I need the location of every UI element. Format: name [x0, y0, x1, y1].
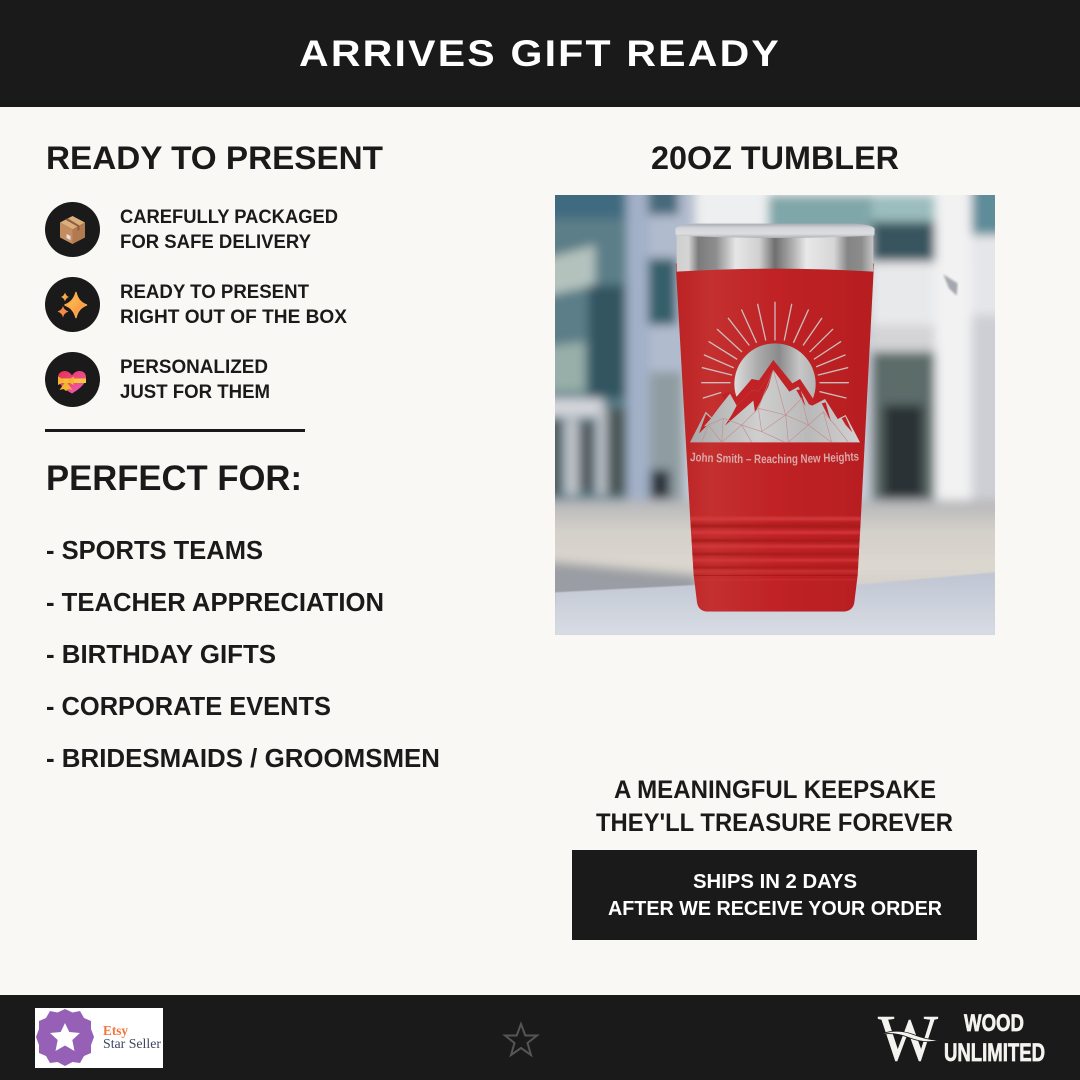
- feature text: FOR SAFE DELIVERY: [120, 232, 311, 253]
- engraved sun logo: John Smith – Reaching New Heights: [690, 452, 859, 466]
- engraved sun logo: [690, 302, 860, 466]
- logo mark: W: W: [878, 1002, 939, 1075]
- feature: personalized: [45, 352, 270, 407]
- footer bar: [0, 995, 1080, 1080]
- feature text: READY TO PRESENT: [120, 282, 309, 303]
- table surface: [555, 572, 995, 635]
- feature: carefully packaged: [45, 202, 338, 257]
- heading: perfect for: PERFECT FOR:: [46, 459, 302, 498]
- occasions list: - TEACHER APPRECIATION: [46, 589, 384, 617]
- engraved name line: [690, 460, 859, 463]
- shipping callout: AFTER WE RECEIVE YOUR ORDER: [608, 898, 943, 920]
- occasions list: - SPORTS TEAMS: [46, 537, 263, 565]
- feature text: JUST FOR THEM: [120, 382, 270, 403]
- photo background: blurred building: [535, 175, 1015, 655]
- shipping callout: SHIPS IN 2 DAYS: [693, 871, 857, 893]
- title: ARRIVES GIFT READY: [299, 33, 781, 74]
- badge: etsy star seller: [35, 1008, 163, 1068]
- tumbler steel band: [677, 235, 873, 272]
- heading: 20oz tumbler: 20OZ TUMBLER: [651, 140, 899, 176]
- feature text: PERSONALIZED: [120, 357, 268, 378]
- icon: gift heart: [58, 371, 86, 394]
- logo: wood unlimited: WOOD: [964, 1010, 1024, 1037]
- shipping callout: [572, 850, 977, 940]
- keepsake tagline: [596, 776, 953, 837]
- feature text: [120, 207, 338, 253]
- tumbler body: [668, 263, 882, 613]
- heading: ready to present: READY TO PRESENT: [46, 140, 383, 176]
- feature text: [120, 282, 347, 328]
- icon: sparkles: [58, 292, 86, 318]
- badge: etsy star seller: Star Seller: [103, 1036, 162, 1051]
- logo: wood unlimited: [878, 1002, 1045, 1075]
- feature text: [120, 357, 270, 403]
- occasions list: [46, 537, 440, 773]
- occasions list: - BIRTHDAY GIFTS: [46, 641, 276, 669]
- badge: etsy star seller: Etsy: [103, 1024, 128, 1039]
- feature text: RIGHT OUT OF THE BOX: [120, 307, 347, 328]
- product photo: red tumbler: [555, 195, 995, 635]
- keepsake tagline: THEY'LL TREASURE FOREVER: [596, 809, 953, 837]
- occasions list: - CORPORATE EVENTS: [46, 693, 331, 721]
- icon: wall lamp: [943, 274, 958, 296]
- feature text: CAREFULLY PACKAGED: [120, 207, 338, 228]
- tumbler ribs: [685, 517, 865, 572]
- occasions list: - BRIDESMAIDS / GROOMSMEN: [46, 745, 440, 773]
- icon: purple scalloped star badge: [36, 1009, 94, 1066]
- icon: package box: [60, 216, 85, 244]
- feature: ready to present: [45, 277, 347, 332]
- tumbler lid: [675, 224, 875, 238]
- icon: footer star: [505, 1024, 537, 1055]
- logo: wood unlimited: UNLIMITED: [944, 1039, 1045, 1067]
- header banner: [0, 0, 1080, 107]
- keepsake tagline: A MEANINGFUL KEEPSAKE: [614, 776, 936, 804]
